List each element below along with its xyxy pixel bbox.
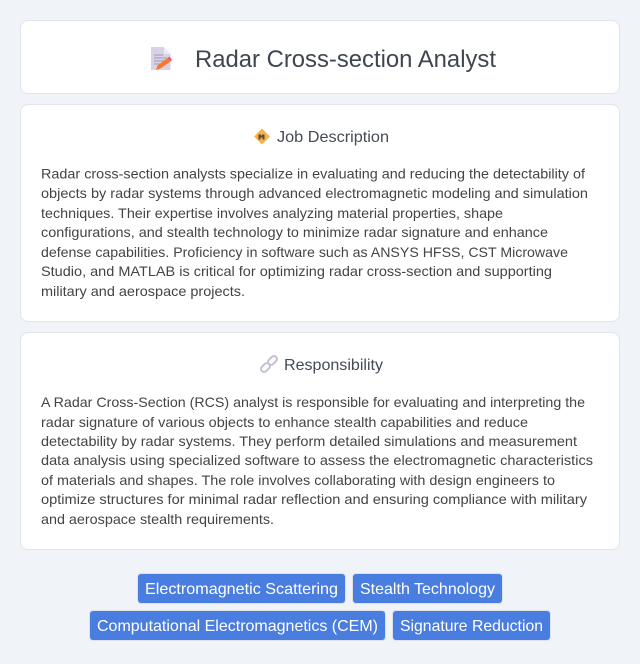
tags: Stealth Technology	[360, 581, 495, 598]
tags: Computational Electromagnetics (CEM)	[97, 618, 378, 635]
text block: job description: Radar cross-section analysts specialize in evaluating and reducing the detectability of	[41, 166, 585, 182]
tags	[97, 581, 543, 635]
text block: job description: defense capabilities. Proficiency in software such as ANSYS HFSS, CST Microwave	[41, 244, 568, 260]
icon: job description diamond	[254, 128, 270, 144]
text block: responsibility: detectability by radar systems. They perform detailed simulations and measurement	[41, 433, 577, 449]
tag background: Computational Electromagnetics	[90, 611, 385, 640]
text block: responsibility: data analysis using specialized software to assess the electromagnetic characteristics	[41, 452, 593, 468]
tags: Electromagnetic Scattering	[145, 581, 338, 598]
text block: job description: objects by radar systems through advanced electromagnetic modeling and simulation	[41, 185, 588, 201]
text block: responsibility: radar signature of various objects to enhance stealth capabilities and reduce	[41, 414, 528, 430]
icon: document with pencil	[151, 47, 172, 70]
text block: job description: Studio, and MATLAB is critical for optimizing radar cross-section and supporting	[41, 263, 552, 279]
text block: responsibility: and aerospace stealth requirements.	[41, 511, 274, 527]
heading: responsibility: Responsibility	[284, 357, 383, 374]
text block: responsibility: of materials and shapes. The role involves collaborating with design engineers to	[41, 472, 555, 488]
tags: Signature Reduction	[400, 618, 543, 635]
panel: responsibility	[20, 332, 620, 550]
text block: job description	[41, 166, 588, 299]
text block: responsibility: A Radar Cross-Section (RCS) analyst is responsible for evaluating and interpreting the	[41, 394, 585, 410]
tag background: Electromagnetic Scattering	[138, 574, 345, 603]
icon: chain link	[260, 355, 278, 373]
text block: job description: configurations, and stealth technology to minimize radar signature and enhance	[41, 224, 548, 240]
text block: job description: techniques. Their expertise involves analyzing material properties, shape	[41, 205, 503, 221]
tag background: Signature Reduction	[393, 611, 550, 640]
panel: job description	[20, 104, 620, 322]
title: Radar Cross-section Analyst	[195, 46, 496, 73]
heading: job description: Job Description	[277, 129, 389, 146]
text block: job description: military and aerospace projects.	[41, 283, 245, 299]
tag background: Stealth Technology	[353, 574, 502, 603]
text block: responsibility	[41, 394, 593, 527]
panel: title	[20, 20, 620, 94]
text block: responsibility: optimize structures for minimal radar reflection and ensuring compliance with military	[41, 491, 587, 507]
